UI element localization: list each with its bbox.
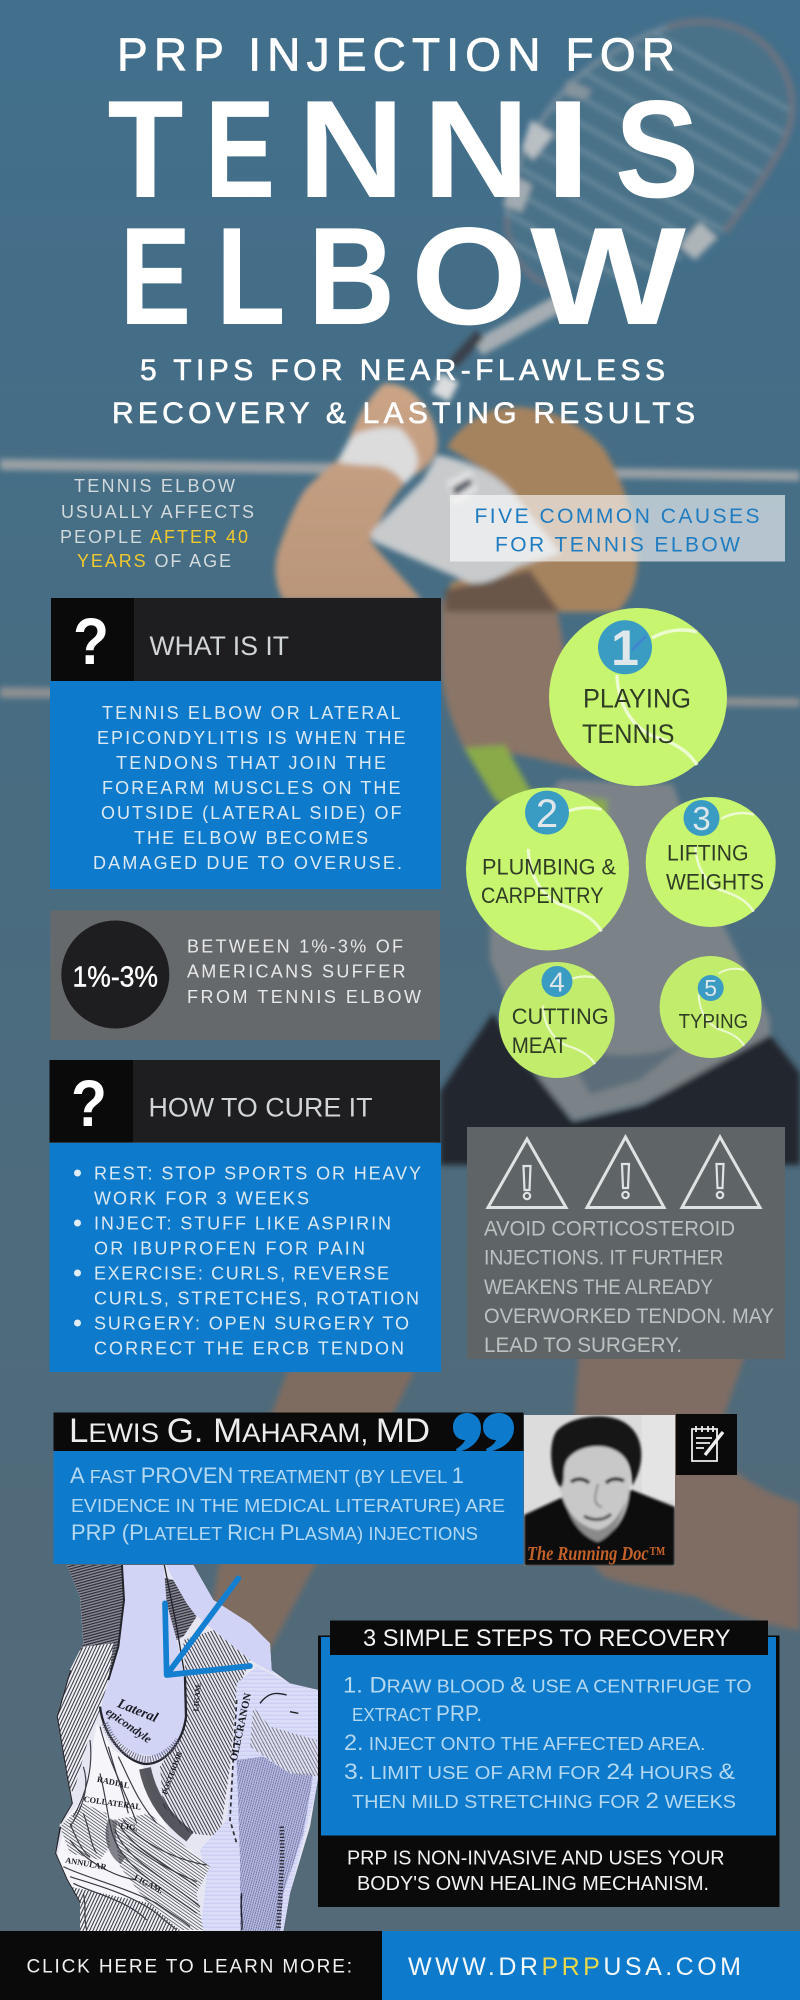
ball 5: typing: TYPING [679, 1011, 748, 1033]
text block: usually affects people after 40: TENNIS ELBOW [74, 476, 235, 496]
panel: causes as tennis balls [466, 608, 776, 1078]
wristband [338, 427, 418, 484]
body: treatment list: INJECT: STUFF LIKE ASPIRIN [94, 1214, 391, 1234]
warning text: LEAD TO SURGERY. [484, 1334, 682, 1357]
icon: warning triangles [488, 1137, 760, 1208]
arrow: pointing at lateral epicondyle [165, 1578, 250, 1675]
body: definition: TENDONS THAT JOIN THE [116, 753, 386, 773]
text block: usually affects people after 40 [60, 476, 254, 571]
green straps [464, 745, 607, 825]
anatomy labels: RADIAL [96, 1775, 131, 1791]
lower left hatching [57, 1643, 113, 1793]
body: treatment list: REST: STOP SPORTS OR HEAVY [94, 1164, 421, 1184]
heading: five common causes: FIVE COMMON CAUSES [474, 505, 760, 528]
panel: 3 simple steps to recovery [318, 1620, 780, 1907]
anatomy labels: COLLATERAL [83, 1795, 142, 1812]
header: what is it: WHAT IS IT [150, 631, 289, 661]
header: what is it: ? [73, 604, 109, 678]
ball 4: cutting meat: MEAT [512, 1033, 567, 1058]
anatomy labels: OLECRANON [229, 1692, 254, 1762]
ligament fibres [63, 1727, 207, 1930]
steps heading [330, 1620, 768, 1655]
ball 4: cutting meat: 4 [549, 966, 565, 998]
body: treatment list [50, 1143, 441, 1372]
subtitle: RECOVERY & LASTING RESULTS [112, 397, 695, 430]
ball 3: lifting weights: WEIGHTS [666, 870, 764, 894]
header: how to cure it [50, 1060, 440, 1142]
ball 4: cutting meat: CUTTING [512, 1004, 609, 1029]
dark outline shadows [108, 1560, 124, 1680]
panel: statistic 1%-3%: BETWEEN 1%-3% OF [187, 936, 403, 956]
closing note: PRP IS NON-INVASIVE AND USES YOUR [347, 1848, 724, 1870]
warning text: WEAKENS THE ALREADY [484, 1276, 713, 1299]
panel: statistic 1%-3%: 1%-3% [72, 962, 158, 994]
footer call to action [0, 1931, 800, 2000]
anatomy labels: epicondyle [103, 1704, 155, 1746]
court lines [0, 459, 345, 474]
ball 1: playing tennis [549, 608, 727, 786]
body: definition: FOREARM MUSCLES ON THE [102, 778, 400, 798]
anatomy labels: ANNULAR [65, 1856, 108, 1872]
panel: statistic 1%-3%: FROM TENNIS ELBOW [187, 987, 421, 1007]
ball 4: cutting meat [499, 962, 615, 1078]
ball 1: playing tennis: TENNIS [582, 719, 674, 749]
radial ligament region [57, 1723, 210, 1933]
anatomy labels [65, 1682, 254, 1895]
body: definition: THE ELBOW BECOMES [134, 828, 368, 848]
panel: corticosteroid warning [467, 1127, 785, 1359]
text block: usually affects people after 40: USUALLY AFFECTS [61, 502, 254, 522]
body: treatment list: CORRECT THE ERCB TENDON [94, 1338, 404, 1358]
subtitle [112, 354, 695, 430]
title line: ELBOW: O [411, 199, 527, 354]
panel: what is it [50, 598, 441, 889]
quote text: EVIDENCE IN THE MEDICAL LITERATURE) ARE [71, 1495, 505, 1516]
text block: usually affects people after 40: YEARS OF AGE [77, 551, 231, 571]
footer call to action: WWW.DRPRPUSA.COM [408, 1953, 741, 1981]
title line: TENNIS: S [615, 72, 699, 227]
upper right lavender [163, 1560, 273, 1673]
ball 1: playing tennis: 1 [611, 620, 639, 676]
shirt [490, 780, 770, 1120]
body: treatment list: WORK FOR 3 WEEKS [94, 1188, 309, 1208]
visor [371, 455, 560, 583]
body: treatment list: OR IBUPROFEN FOR PAIN [94, 1238, 365, 1258]
ball 2: plumbing and carpentry: 2 [536, 792, 558, 836]
steps list [321, 1637, 776, 1836]
anatomy labels: POSTERIOR [160, 1750, 184, 1796]
title line: TENNIS: N [423, 72, 530, 227]
heading: five common causes: FOR TENNIS ELBOW [495, 534, 740, 556]
panel: statistic 1%-3%: AMERICANS SUFFER [187, 962, 406, 982]
hair [447, 407, 637, 612]
header: what is it [51, 598, 441, 681]
body: definition: OUTSIDE (LATERAL SIDE) OF [101, 803, 402, 823]
steps list: 1. DRAW BLOOD & USE A CENTRIFUGE TO [343, 1672, 752, 1698]
title line: ELBOW: B [308, 199, 395, 354]
icon: notepad and pen [676, 1414, 737, 1475]
name bar: LEWIS G. MAHARAM, MD [69, 1412, 430, 1450]
title line: TENNIS: T [108, 72, 184, 227]
portrait: The Running Doc [524, 1415, 675, 1566]
body: treatment list: CURLS, STRETCHES, ROTATION [94, 1288, 419, 1308]
ulna lavender [200, 1667, 320, 1933]
steps list: THEN MILD STRETCHING FOR 2 WEEKS [352, 1788, 736, 1813]
steps list: 2. INJECT ONTO THE AFFECTED AREA. [344, 1730, 706, 1755]
epicondyle [100, 1560, 187, 1757]
title line: TENNIS: E [205, 72, 275, 227]
anatomy labels: LIGAM. [132, 1873, 164, 1895]
left humerus band [64, 1565, 123, 1692]
icon: anatomical drawing of the elbow [50, 1560, 330, 1940]
panel: statistic 1%-3% [50, 910, 440, 1040]
steps heading: 3 SIMPLE STEPS TO RECOVERY [363, 1625, 730, 1652]
panel: how to cure it [50, 1060, 441, 1372]
subtitle: 5 TIPS FOR NEAR-FLAWLESS [140, 354, 665, 387]
racket bumper guards [522, 120, 553, 160]
skirt [440, 1013, 800, 1165]
warning text [484, 1218, 774, 1357]
ball 3: lifting weights: LIFTING [667, 840, 748, 866]
warning text: INJECTIONS. IT FURTHER [484, 1246, 724, 1270]
title [108, 28, 699, 430]
title line: ELBOW: E [120, 199, 191, 354]
icon: quotation marks [453, 1413, 514, 1452]
title line: ELBOW: L [216, 199, 286, 354]
ball 2: plumbing and carpentry [466, 788, 629, 950]
title line: TENNIS: I [545, 72, 591, 227]
text block: usually affects people after 40: PEOPLE AFTER 40 [60, 527, 248, 547]
racket throat and grip [478, 300, 565, 348]
ball 3: lifting weights [646, 797, 776, 927]
body: treatment list: EXERCISE: CURLS, REVERSE [94, 1264, 389, 1284]
right thigh and calf [570, 1350, 800, 1630]
shoulder skin [441, 600, 590, 770]
body: treatment list: SURGERY: OPEN SURGERY TO [94, 1314, 409, 1334]
title line: ELBOW: W [530, 199, 687, 354]
racket head [507, 21, 792, 287]
steps list: EXTRACT PRP. [352, 1701, 482, 1726]
ball 5: typing [660, 956, 762, 1058]
warning text: AVOID CORTICOSTEROID [484, 1218, 735, 1240]
left leg [205, 1370, 415, 1650]
quote text [54, 1451, 524, 1564]
ball 2: plumbing and carpentry: CARPENTRY [481, 883, 604, 908]
warning text: OVERWORKED TENDON. MAY [484, 1305, 774, 1328]
title line: PRP INJECTION FOR: PRP INJECTION FOR [117, 28, 675, 80]
left arm and hand [275, 384, 438, 600]
body: definition: EPICONDYLITIS IS WHEN THE [97, 728, 406, 748]
body: definition: DAMAGED DUE TO OVERUSE. [93, 853, 402, 873]
closing note: BODY'S OWN HEALING MECHANISM. [357, 1873, 709, 1895]
anatomy labels: Lateral [114, 1696, 160, 1726]
quote text: PRP (PLATELET RICH PLASMA) INJECTIONS [71, 1520, 478, 1545]
header: how to cure it: ? [71, 1066, 107, 1140]
panel: doctor quote [54, 1412, 737, 1566]
anatomy labels: LIG. [120, 1821, 138, 1833]
ball 3: lifting weights: 3 [692, 800, 711, 837]
anatomy labels: LIGAM. [191, 1682, 203, 1712]
body: definition: TENNIS ELBOW OR LATERAL [102, 703, 400, 723]
header: how to cure it: HOW TO CURE IT [148, 1092, 372, 1122]
ball 1: playing tennis: PLAYING [583, 684, 691, 714]
ball 5: typing: 5 [704, 975, 717, 1001]
footer call to action: CLICK HERE TO LEARN MORE: [26, 1956, 352, 1978]
heading: five common causes [450, 495, 785, 562]
quote text: A FAST PROVEN TREATMENT (BY LEVEL 1 [70, 1463, 464, 1488]
ball 2: plumbing and carpentry: PLUMBING & [482, 854, 616, 880]
portrait: The Running Doc: The Running Doc™ [527, 1543, 665, 1565]
steps list: 3. LIMIT USE OF ARM FOR 24 HOURS & [344, 1759, 735, 1784]
title line: TENNIS: N [298, 72, 405, 227]
closing note [347, 1848, 724, 1895]
body: definition [50, 681, 441, 889]
